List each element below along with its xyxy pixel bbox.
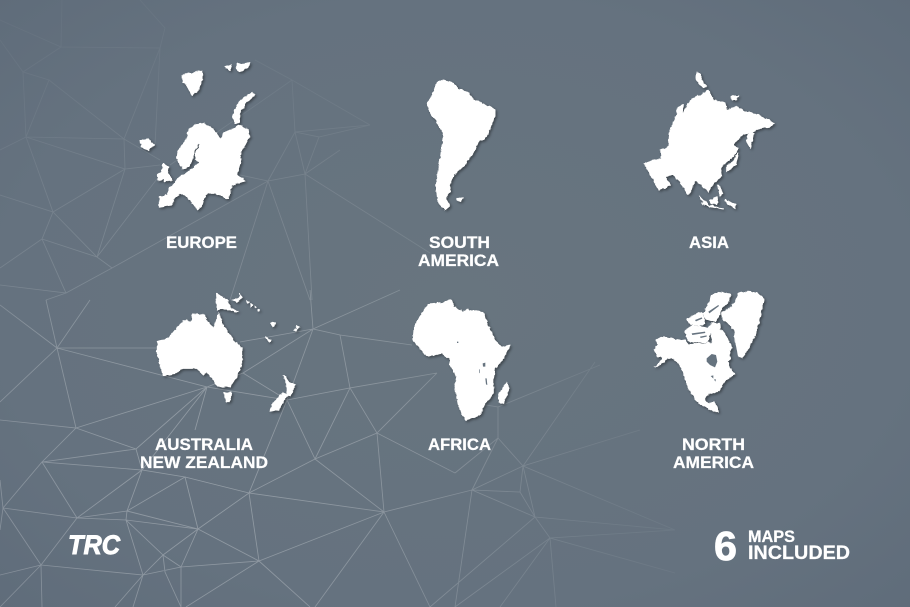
panel: Europe — [140, 63, 254, 252]
label: Europe: EUROPE — [166, 234, 237, 252]
label: North America: AMERICA — [673, 454, 754, 472]
map: South America — [427, 80, 495, 210]
panel: Asia — [644, 73, 774, 252]
label: Australia and New Zealand: AUSTRALIA — [155, 436, 253, 454]
callout: 6 maps included: MAPS — [748, 528, 795, 546]
label: South America: AMERICA — [418, 252, 499, 270]
label: Asia: ASIA — [689, 234, 729, 252]
label: South America — [418, 234, 499, 270]
label: South America: SOUTH — [429, 234, 490, 252]
map: Africa — [413, 300, 510, 420]
label: Africa: AFRICA — [428, 436, 491, 454]
panel: Africa — [413, 300, 510, 454]
map: Asia — [644, 73, 774, 209]
logo: TRC: TRC — [68, 530, 120, 560]
label: North America — [673, 436, 754, 472]
callout: 6 maps included — [714, 523, 850, 569]
map: Australia and New Zealand — [157, 293, 299, 412]
panel: South America — [418, 80, 499, 270]
panel: Australia and New Zealand — [140, 293, 299, 472]
panel: North America — [654, 292, 764, 472]
map: Europe — [140, 63, 254, 209]
label: North America: NORTH — [682, 436, 745, 454]
callout: 6 maps included: INCLUDED — [748, 542, 850, 564]
label: Australia and New Zealand — [140, 436, 268, 472]
callout: 6 maps included: 6 — [714, 523, 737, 569]
label: Australia and New Zealand: NEW ZEALAND — [140, 454, 268, 472]
map: North America — [654, 292, 764, 412]
